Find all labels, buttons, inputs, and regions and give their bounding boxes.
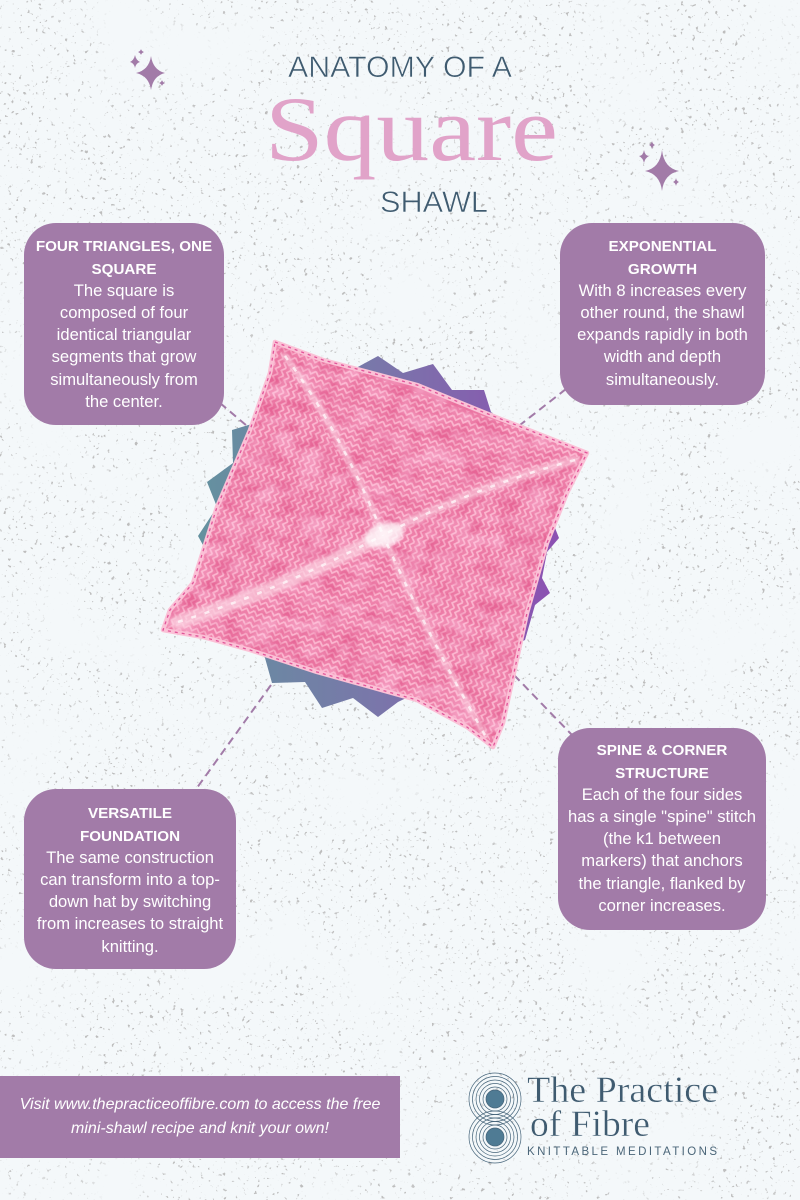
panel: spine and corner structure: corner increases.: [598, 896, 726, 915]
lace spines: [178, 356, 575, 735]
title line: square: Square: [265, 78, 558, 180]
panel: four triangles, one square: FOUR TRIANGLES, ONE: [36, 238, 212, 254]
panel: versatile foundation: from increases to straight: [37, 914, 223, 933]
footer callout: Visit www.thepracticeoffibre.com to access the free: [20, 1096, 380, 1113]
panel: spine and corner structure: markers) that anchors: [581, 851, 743, 870]
panel: spine and corner structure: STRUCTURE: [615, 765, 709, 782]
title line: anatomy of a: ANATOMY OF A: [288, 51, 512, 84]
jagged background burst behind shawl: [198, 356, 559, 717]
panel: four triangles, one square: the center.: [85, 392, 163, 411]
knitted square shawl photo: [150, 330, 600, 760]
panel: exponential growth: With 8 increases every: [579, 281, 746, 300]
icon: sparkles upper left: [130, 49, 165, 90]
panel: exponential growth: other round, the shawl: [580, 303, 745, 322]
panel: spine and corner structure: the triangle, flanked by: [579, 874, 745, 893]
panel: spine and corner structure: [558, 728, 766, 930]
panel: four triangles, one square: composed of four: [60, 303, 188, 322]
panel: exponential growth: GROWTH: [628, 261, 697, 278]
panel: four triangles, one square: identical triangular: [57, 325, 191, 344]
panel: exponential growth: expands rapidly in both: [577, 325, 748, 344]
panel: exponential growth: [560, 223, 765, 405]
panel: spine and corner structure: Each of the four sides: [582, 785, 742, 804]
panel: spine and corner structure: has a single "spine" stitch: [568, 807, 756, 826]
panel: versatile foundation: The same construction: [46, 848, 214, 867]
shawl border: [163, 342, 587, 747]
panel: spine and corner structure: (the k1 between: [603, 829, 721, 848]
panel: versatile foundation: knitting.: [101, 937, 159, 956]
title: [265, 51, 558, 219]
panel: versatile foundation: can transform into a top-: [40, 870, 220, 889]
logo: [469, 1070, 718, 1163]
panel: exponential growth: simultaneously.: [606, 370, 719, 389]
stitch texture: [166, 346, 584, 744]
logo: KNITTABLE MEDITATIONS: [527, 1146, 717, 1158]
panel: four triangles, one square: simultaneously from: [50, 370, 198, 389]
panel: versatile foundation: [24, 789, 236, 969]
footer callout: mini-shawl recipe and knit your own!: [71, 1120, 329, 1136]
panel: exponential growth: width and depth: [604, 347, 721, 366]
title line: shawl: SHAWL: [380, 186, 488, 219]
footer callout: [0, 1076, 400, 1158]
panel: exponential growth: EXPONENTIAL: [608, 238, 716, 254]
panel: four triangles, one square: [24, 223, 224, 425]
shawl body: [163, 342, 587, 747]
panel: versatile foundation: down hat by switching: [49, 892, 211, 911]
logo mark: figure eight of concentric rings: [469, 1073, 521, 1163]
panel: versatile foundation: FOUNDATION: [80, 828, 180, 845]
panel: four triangles, one square: SQUARE: [92, 261, 156, 278]
panel: four triangles, one square: The square is: [74, 281, 174, 300]
logo: of Fibre: [530, 1104, 650, 1145]
panel: versatile foundation: VERSATILE: [88, 804, 172, 822]
panel: four triangles, one square: segments that grow: [52, 347, 196, 366]
panel: spine and corner structure: SPINE & CORNER: [597, 742, 727, 758]
logo wordmark: The Practice: [527, 1070, 718, 1111]
dashed connector lines: [194, 389, 572, 792]
icon: sparkles upper right: [639, 141, 679, 191]
